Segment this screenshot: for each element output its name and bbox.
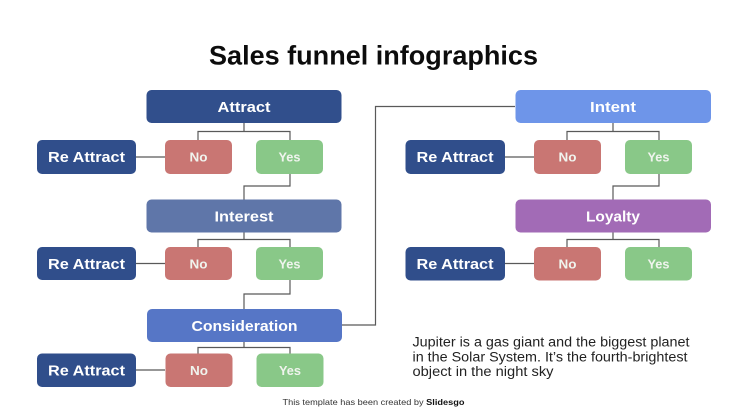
row: interest outcomes: Yes	[278, 256, 300, 272]
row: attract outcomes: Yes	[278, 150, 300, 164]
row: attract outcomes: No	[190, 150, 208, 164]
panel: attract: Attract	[218, 99, 271, 116]
row: intent outcomes: Yes	[648, 150, 670, 164]
row: attract outcomes	[37, 140, 323, 174]
title: Sales funnel infographics	[209, 40, 538, 70]
row: consideration outcomes: No	[190, 363, 208, 378]
panel: intent: Intent	[590, 99, 636, 116]
row: consideration outcomes: Re Attract	[48, 362, 125, 380]
row: interest outcomes: Re Attract	[48, 256, 125, 273]
panel: consideration	[147, 309, 342, 342]
row: consideration outcomes: Yes	[279, 363, 301, 378]
panel: attract	[146, 90, 342, 123]
panel: intent	[516, 90, 711, 123]
row: loyalty outcomes: Re Attract	[416, 256, 494, 273]
row: attract outcomes: Re Attract	[48, 149, 125, 166]
row: loyalty outcomes: No	[558, 256, 577, 272]
row: loyalty outcomes	[406, 247, 692, 280]
panel: interest	[146, 200, 342, 232]
text block: description: in the Solar System. It’s the fourth-brightest	[412, 350, 688, 364]
panel: loyalty	[516, 200, 711, 232]
text block: description	[412, 334, 690, 379]
row: intent outcomes: No	[558, 150, 577, 164]
text block: description: object in the night sky	[412, 364, 554, 379]
row: loyalty outcomes: Yes	[648, 256, 670, 272]
row: consideration outcomes	[37, 354, 324, 387]
panel: loyalty: Loyalty	[586, 208, 641, 226]
text block: description: Jupiter is a gas giant and the biggest planet	[412, 334, 690, 350]
row: interest outcomes: No	[190, 256, 208, 272]
footer credit: This template has been created by Slidesgo	[282, 397, 464, 407]
panel: interest: Interest	[214, 208, 274, 226]
row: intent outcomes: Re Attract	[416, 149, 494, 166]
row: intent outcomes	[406, 140, 692, 174]
panel: consideration: Consideration	[192, 318, 298, 335]
connector lines	[136, 106, 659, 370]
row: interest outcomes	[37, 247, 323, 280]
